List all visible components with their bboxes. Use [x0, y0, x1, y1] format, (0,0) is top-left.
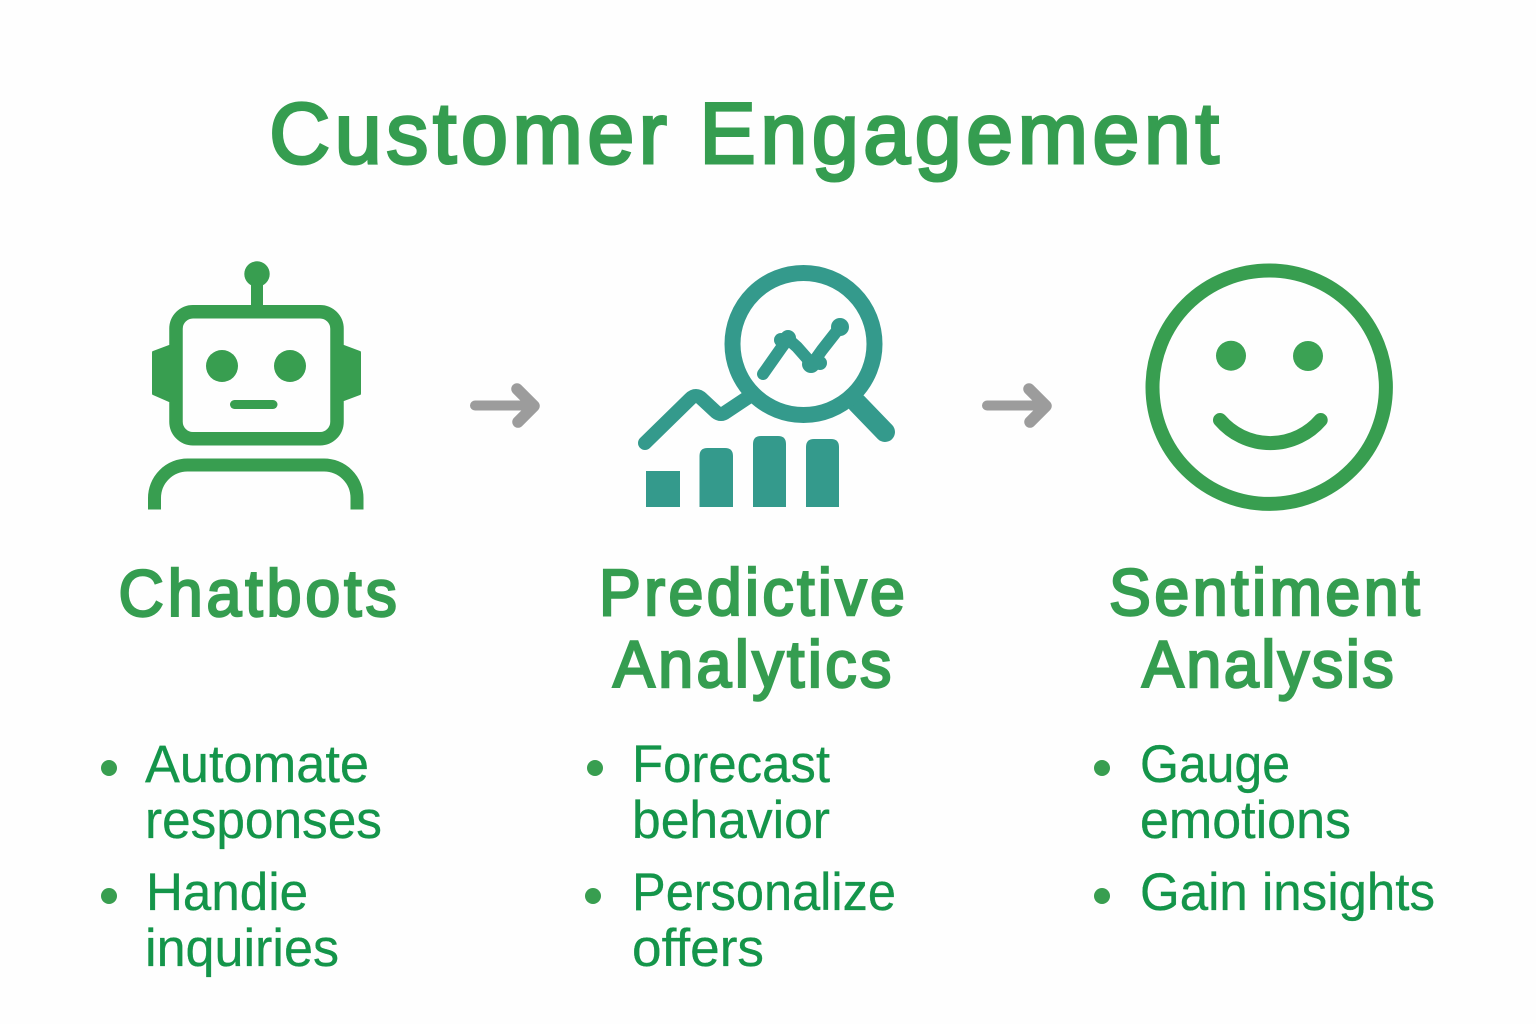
arrow: chatbots to predictive analytics: [475, 389, 534, 422]
bullet list: predictive analytics: offers: [632, 919, 764, 978]
title: Customer Engagement: [269, 86, 1219, 182]
bullet list: predictive analytics: [585, 735, 896, 978]
bullet list: sentiment analysis: Gain insights: [1140, 863, 1435, 922]
bullet list: chatbots: Automate: [145, 735, 369, 794]
bullet list: predictive analytics: behavior: [632, 791, 830, 850]
arrow: predictive analytics to sentiment analysis: [987, 389, 1046, 422]
bullet list: predictive analytics: Forecast: [632, 735, 830, 794]
bullet list: chatbots: inquiries: [145, 919, 339, 978]
bullet list: sentiment analysis: Gauge: [1140, 735, 1290, 794]
icon: analytics magnifier: [645, 273, 885, 507]
heading: chatbots: Chatbots: [118, 557, 397, 630]
icon: smiley: [1152, 270, 1386, 504]
heading: sentiment analysis: Analysis: [1142, 628, 1394, 701]
bullet list: chatbots: Handie: [146, 863, 308, 922]
heading: sentiment analysis: Sentiment: [1109, 556, 1420, 629]
heading: predictive analytics: Predictive: [599, 556, 905, 629]
heading: sentiment analysis: [1109, 556, 1420, 701]
bullet list: sentiment analysis: emotions: [1140, 791, 1351, 850]
icon: robot: [152, 261, 361, 510]
bullet list: sentiment analysis: [1094, 735, 1435, 922]
bullet list: chatbots: responses: [145, 791, 382, 850]
bullet list: chatbots: [101, 735, 382, 978]
heading: predictive analytics: Analytics: [613, 628, 891, 701]
bullet list: predictive analytics: Personalize: [632, 863, 896, 922]
heading: predictive analytics: [599, 556, 905, 701]
